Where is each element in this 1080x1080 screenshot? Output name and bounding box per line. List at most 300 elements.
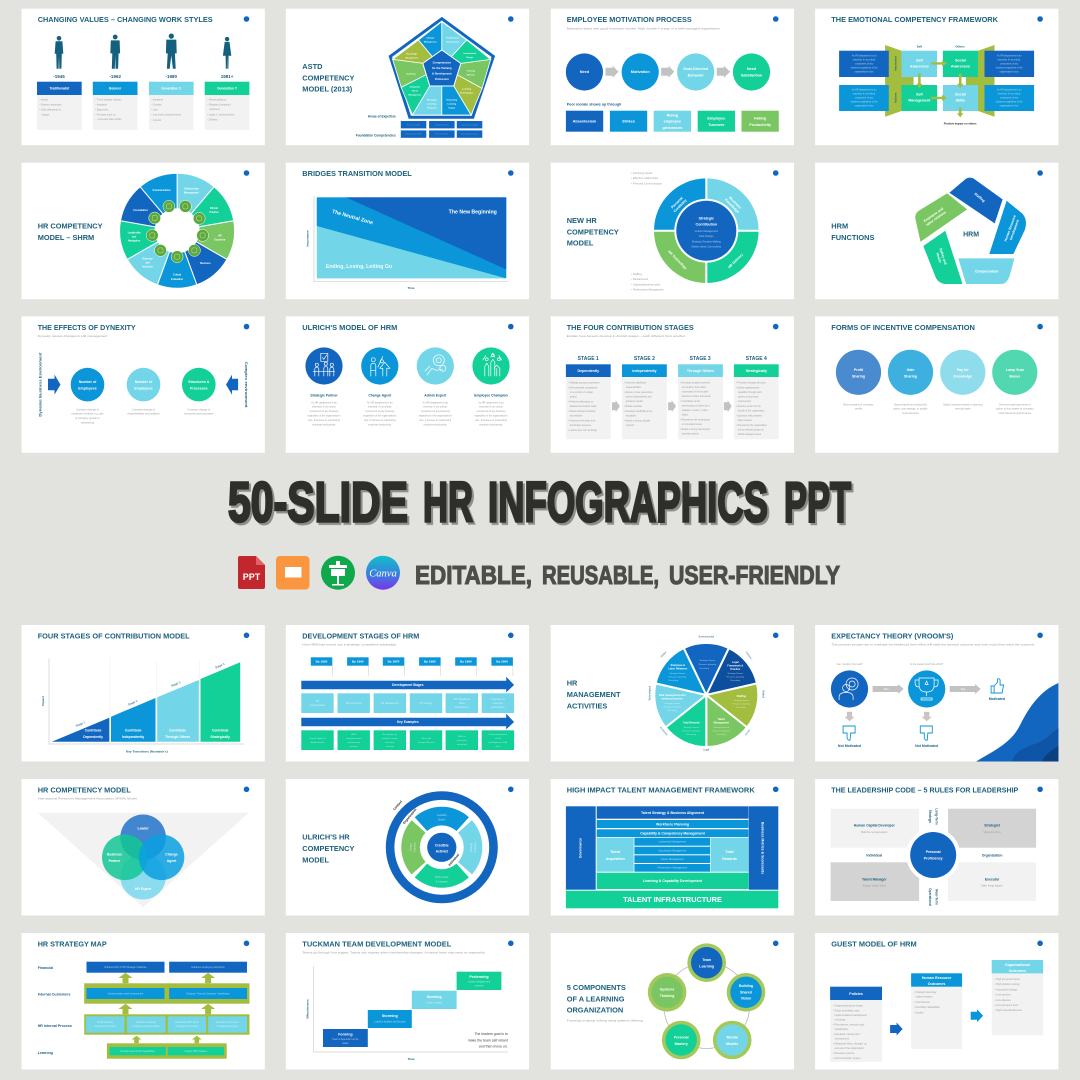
- generation columns: change: [42, 114, 50, 117]
- chart: stepped area: Contribute: [125, 728, 142, 732]
- heading: activities: HR: [567, 679, 578, 688]
- example boxes: Administration: [311, 741, 325, 744]
- framework diagram: Awareness: [951, 65, 970, 69]
- chart: pentagon: Programs: [427, 107, 437, 110]
- stage columns: Dependently: [578, 369, 599, 373]
- bullets: • Personal Communication: [631, 181, 662, 185]
- heading: ASTD: COMPETENCY: [302, 73, 355, 82]
- outer factor labels: Political: [762, 690, 765, 699]
- note: leader goal: [468, 1032, 508, 1048]
- heading: HRM functions: FUNCTIONS: [831, 233, 874, 242]
- panel: ASTD competency model: [286, 9, 529, 145]
- question captions: Can I perform the task?: [836, 663, 863, 666]
- chart: pentagon: Instructional: [464, 52, 476, 55]
- row labels: [38, 966, 72, 1055]
- chart: stepped area: Contribute: [85, 728, 102, 732]
- chart: pentagon: Managing: [427, 100, 437, 102]
- chart: competency wheel: Inclusion: [142, 266, 153, 269]
- chart: pentagon: Technologies: [460, 93, 474, 95]
- column: organizational outcomes: • Low grievance level: [995, 1004, 1019, 1007]
- heading: dynexity: THE EFFECTS OF DYNEXITY: [38, 323, 136, 332]
- chart: competency wheel: Ethical: [210, 207, 218, 210]
- center circle: Proficiency: [924, 856, 943, 860]
- arrows: [118, 973, 215, 1043]
- framework blocks: Career Management: [661, 858, 684, 861]
- framework blocks: Talent Strategy & Business Alignment: [641, 811, 705, 815]
- stage columns: • Develops broader business: [680, 381, 711, 384]
- role descriptions: An HR department is an: [423, 401, 449, 404]
- panel: employee motivation process: Motivation starts with good employee morale. High morale = a sign of a well-managed organization.: [567, 26, 721, 30]
- chart: pentagon: Management: [405, 57, 418, 60]
- descriptions: improvements: [902, 411, 919, 415]
- stage boxes: HR: [316, 700, 319, 703]
- chart: staircase: Leader delegates and: [468, 980, 491, 984]
- chart: concentric rings: [390, 796, 494, 899]
- incentive circles: Sharing: [904, 374, 917, 378]
- stage columns: on important issues: [682, 423, 703, 426]
- panel: expectancy theory: [815, 625, 1058, 762]
- framework diagram: Self: [916, 59, 923, 63]
- panel: learning organization: [551, 933, 794, 1070]
- role descriptions: employee productivity.: [479, 423, 503, 426]
- stage columns: [566, 364, 779, 439]
- foundation labels: Areas of Expertise: [368, 115, 396, 119]
- heading: new HR: NEW HR: [567, 216, 597, 225]
- stage boxes: Value: [459, 702, 465, 705]
- icon: PPT file: [238, 556, 265, 589]
- framework diagram: business regardless of the: [851, 101, 878, 104]
- generation columns: • Diehard: [208, 119, 218, 122]
- icon: four silhouettes: [55, 34, 231, 69]
- outer factor labels: Global: [660, 651, 667, 658]
- column: policies: socialization: [835, 1028, 849, 1031]
- chart: staircase: [305, 966, 508, 1061]
- generation columns: • Little willingness to: [40, 109, 62, 112]
- subtitle: EDITABLE,: [415, 560, 532, 590]
- arrows: [606, 66, 730, 78]
- chart: competency wheel: Practice: [209, 211, 219, 214]
- outer factor labels: Social: [744, 729, 751, 736]
- poor morale boxes: grievances: [662, 126, 682, 130]
- stage columns: • Exercise power for the: [736, 405, 762, 408]
- poor morale boxes: Strikes: [622, 120, 635, 124]
- bullets: • Development: [631, 277, 648, 281]
- heading: strategy map: HR STRATEGY MAP: [38, 940, 107, 949]
- heading: new HR: [567, 216, 619, 248]
- circles: Processes: [190, 386, 208, 390]
- role descriptions: An HR department is an: [478, 401, 504, 404]
- chart: activity pie: Strategic Human: [734, 699, 750, 702]
- stage columns: • Relies on less supervision;: [624, 391, 654, 394]
- example boxes: development of HR: [489, 741, 508, 744]
- chart: activity pie: Staffing: [737, 695, 746, 698]
- chart: competency wheel: Navigation: [128, 240, 141, 243]
- heading: contribution stages: THE FOUR CONTRIBUTION STAGES: [567, 323, 694, 332]
- chart: competency wheel: HR: [218, 235, 222, 238]
- poor morale boxes: Employee: [707, 117, 725, 121]
- stage columns: • Builds a strong collegial: [624, 419, 651, 422]
- heading: SHRM: HR COMPETENCY: [38, 222, 103, 231]
- descriptions: Salary increase based on learning: [943, 402, 983, 406]
- stage boxes: Stakeholders: [455, 706, 470, 709]
- column: organizational outcomes: • Low absence: [995, 999, 1012, 1002]
- stage columns: • Performs effectively on: [568, 400, 594, 403]
- panel: HR strategy map: [22, 933, 265, 1070]
- years: -1962: [109, 74, 121, 79]
- framework blocks: Business Metrics & Scorecards: [761, 822, 765, 874]
- arrows: yes: Yes: [884, 687, 889, 691]
- framework diagram: organization's size: [1000, 105, 1019, 108]
- descriptions: to company growth or: [75, 416, 100, 420]
- generation columns: • Needs guidance: [208, 99, 227, 102]
- example boxes: computerization: [346, 737, 362, 740]
- chart: activity pie: Framework &: [727, 664, 743, 668]
- generation columns: • Lacks + / personal drive: [208, 114, 235, 117]
- incentive circles: Gain: [907, 368, 914, 372]
- chart: activity pie: Recruiting: [737, 706, 747, 709]
- panel: leadership code: [815, 779, 1058, 916]
- panel: development stages of HRM: How HRM has turned into a strategic competitive advantage: [302, 643, 397, 647]
- framework diagram: essential, if not critical,: [853, 59, 876, 62]
- generation columns: • Avoids: [40, 99, 49, 102]
- years: 1981+: [221, 74, 234, 79]
- chart: ring: [654, 178, 759, 283]
- example boxes: [301, 730, 514, 750]
- foundation boxes: Industry Knowledge: [461, 123, 479, 126]
- chart: concentric rings: HR Innovator: [435, 876, 449, 879]
- framework diagram: Awareness: [894, 55, 898, 71]
- example boxes: workforce needs: [382, 737, 399, 740]
- chart: activity pie: Resource planning: [713, 730, 731, 732]
- framework blocks: Total: [725, 850, 734, 854]
- chart: HRM cycle: Safety and: [938, 248, 948, 265]
- descriptions: Constant change of: [132, 407, 155, 411]
- foundation boxes: Personal Skills: [435, 134, 448, 136]
- stage boxes: HR Strategy: [419, 702, 433, 705]
- chart: pentagon: Training: [467, 70, 476, 73]
- chart: five circles: Vision: [741, 997, 751, 1001]
- arrows: yes: Yes: [961, 687, 966, 691]
- panel: talent management framework: [551, 779, 794, 916]
- chart: competency wheel: Expertise: [214, 239, 226, 242]
- column: policies: development: [835, 1038, 849, 1040]
- outer factor labels: Technological: [649, 686, 652, 701]
- heading: SHRM: MODEL – SHRM: [38, 233, 94, 242]
- timeline flags: [311, 657, 513, 676]
- quadrant boxes: Strategist: [984, 824, 1001, 828]
- panel: forms of incentive compensation: [815, 316, 1058, 453]
- outer factor labels: Cultural /: [745, 651, 753, 661]
- stage labels: STAGE 2: [634, 356, 655, 362]
- panel: effects of dynexity: Dynexity causes changes in HR management: [38, 334, 108, 338]
- descriptions: Constant change of: [76, 407, 99, 411]
- chart: concentric rings: Builder: [438, 818, 446, 821]
- chart: five circles: Building: [739, 984, 753, 988]
- role descriptions: employee productivity.: [312, 423, 336, 426]
- panel: emotional competency framework: [815, 9, 1058, 145]
- framework blocks: Succession Management: [658, 849, 687, 852]
- stage columns: • Willingly accepts supervision: [568, 381, 600, 384]
- role descriptions: regardless of the organization's: [419, 414, 453, 417]
- column: HR outcomes: • Quality: [914, 1012, 924, 1014]
- chart: pentagon: Knowledge: [406, 54, 418, 56]
- foundation labels: Foundation Competencies: [356, 134, 396, 138]
- chart: competency wheel: Evaluation: [171, 278, 184, 281]
- icon: slides: [276, 556, 310, 590]
- chart: activity pie: Total Rewards: [683, 722, 700, 724]
- venn diagram: [102, 814, 184, 900]
- labels: not motivated: Not Motivated: [915, 744, 938, 748]
- poor morale boxes: Falling: [754, 117, 767, 121]
- framework diagram: business regardless of the: [851, 67, 878, 70]
- chart: pentagon: Delivery: [467, 74, 476, 77]
- strategy blocks: Enhance ROI of HR Strategic Initiatives: [105, 966, 147, 969]
- ring labels: Individual: [447, 853, 460, 867]
- chart: five circles: Systems: [660, 988, 674, 992]
- outer factor labels: Environmental: [699, 636, 714, 638]
- chart: staircase: Forming: [338, 1032, 353, 1036]
- heading: incentive: FORMS OF INCENTIVE COMPENSATION: [831, 323, 975, 332]
- stage columns: Strategically: [746, 369, 767, 373]
- panel: four contribution stages: [551, 316, 794, 453]
- column: policies: • Recruitment, selection and: [833, 1024, 865, 1026]
- venn diagram: Leader: [138, 826, 149, 830]
- stage columns: • Builds expertise: [624, 405, 643, 408]
- chart: concentric rings: Positioner: [474, 842, 477, 852]
- main title: 50-SLIDE: [228, 470, 408, 534]
- column: organizational outcomes: Organizational: [1005, 963, 1030, 967]
- role names: Admin Expert: [424, 393, 447, 397]
- stage columns: network: [626, 424, 635, 427]
- role descriptions: [307, 401, 508, 426]
- chart: activity pie: Strategic Human: [714, 726, 730, 729]
- subtitle: USER-FRIENDLY: [669, 560, 840, 590]
- column: policies: • Communication system: [833, 1057, 861, 1060]
- chart: HRM cycle: [915, 178, 1026, 284]
- chart: HRM cycle: HRM: [963, 232, 979, 239]
- stage columns: on a portion of a larger: [570, 391, 593, 394]
- framework blocks: Learning & Capability Development: [643, 879, 703, 883]
- panel: four contribution stages: Explain how careers develop in distinct stages – each different from another.: [567, 334, 686, 338]
- panel: four stages of contribution model: [22, 625, 265, 762]
- stage columns: responsibilities: [626, 386, 642, 389]
- chart: pentagon: Improvement: [446, 41, 460, 44]
- generation columns: processes than results: [98, 118, 122, 121]
- question captions: [836, 663, 944, 666]
- descriptions: structures and processes: [184, 412, 214, 416]
- stage columns: improvement: [738, 400, 752, 403]
- arrow: development stages: Development Stages: [392, 683, 424, 687]
- stage columns: Through Others: [687, 369, 714, 373]
- chart: activity pie: Recruiting: [717, 733, 727, 736]
- chart: stepped area: [41, 658, 244, 754]
- column: HR outcomes: [911, 973, 962, 1049]
- stage columns: leader: [682, 413, 688, 416]
- column: organizational outcomes: • Successful change: [995, 988, 1018, 992]
- framework diagram: component of any: [1000, 63, 1019, 66]
- ring labels: Organization: [402, 808, 418, 825]
- label: motivated: Motivated: [989, 697, 1005, 701]
- column: organizational outcomes: • High problem solving: [995, 983, 1020, 986]
- foundation boxes: Technology Literacy: [461, 133, 478, 136]
- strategy blocks: [84, 962, 250, 1059]
- time labels: Operational: [928, 888, 932, 906]
- chart: transition zones: [305, 196, 508, 290]
- column: policies: of change: [835, 1018, 846, 1022]
- example boxes: learning: [350, 745, 358, 748]
- chart: competency wheel: Business: [200, 262, 211, 265]
- chart: activity pie: Talent: [718, 718, 725, 721]
- framework blocks: Acquisition: [606, 857, 625, 861]
- descriptions: stock based on performance: [998, 411, 1032, 415]
- chart: ring: Contribution: [696, 223, 717, 227]
- chart: pentagon: Learning: [462, 88, 472, 91]
- heading: expectancy: EXPECTANCY THEORY (VROOM'S): [831, 632, 954, 641]
- generation columns: • Impatient: [152, 99, 163, 102]
- descriptions: gains, cost savings, or quality: [894, 407, 928, 411]
- descriptions: One-time cash payments or: [999, 402, 1031, 406]
- venn diagram: HR Expert: [135, 887, 152, 891]
- chart: staircase: Effectiveness: [305, 999, 309, 1019]
- chart: activity pie: Management: [714, 722, 729, 724]
- years: [53, 74, 234, 79]
- chart: activity pie: [654, 643, 758, 747]
- framework blocks: Performance Management: [657, 867, 687, 870]
- role descriptions: regardless of the organization's: [307, 414, 341, 417]
- role descriptions: component of any business: [476, 410, 506, 413]
- bullets: [631, 171, 664, 292]
- framework diagram: An HR department is an: [852, 89, 877, 92]
- generation columns: • Focused more on: [96, 114, 116, 117]
- column: HR outcomes: Outcomes: [928, 982, 945, 986]
- process circles: [566, 53, 770, 91]
- stage columns: future leaders: [738, 419, 753, 422]
- stage labels: STAGE 4: [746, 356, 767, 362]
- framework blocks: [566, 806, 778, 908]
- note: leader goal: and then move on.: [479, 1044, 508, 1048]
- strategy blocks: recruitment process: [95, 1025, 116, 1028]
- example boxes: of HR: [495, 738, 501, 740]
- chart: pentagon: Profession: [435, 77, 449, 81]
- generation columns: Generation X: [161, 87, 182, 91]
- chart: staircase: Team is dependent on the: [332, 1038, 359, 1041]
- chart: ring: Strategic Decision-Making: [692, 240, 721, 243]
- process circles: Satisfaction: [741, 74, 763, 78]
- icon circles: [305, 347, 510, 385]
- chart: HRM cycle: Development: [1009, 218, 1020, 241]
- chart: activity pie: Strategic Human: [670, 672, 686, 675]
- foundation boxes: Business Skills: [407, 124, 420, 126]
- stage columns: understand in the broader: [682, 390, 709, 393]
- panel: learning organization: Focusing on group solving using systems thinking: [567, 1018, 643, 1022]
- chart: activity pie: Recruiting: [700, 667, 710, 670]
- main title: HR: [423, 470, 473, 534]
- chart: pentagon: Integrated: [410, 86, 421, 89]
- generation columns: • Low level of assertiveness: [152, 114, 182, 117]
- time labels: [928, 808, 939, 906]
- process circles: Behavior: [688, 74, 704, 78]
- column: organizational outcomes: [992, 960, 1043, 1035]
- chart: activity pie: Risk management and: [659, 694, 686, 697]
- role descriptions: component of any business: [421, 410, 451, 413]
- stage columns: • Learns how "we" do things: [568, 429, 598, 432]
- heading: learning organization: OF A LEARNING: [567, 994, 625, 1003]
- chart: competency wheel: and: [132, 236, 137, 239]
- descriptions: employee numbers e.g. due: [71, 412, 104, 416]
- stage columns: • Develops credibility and a: [624, 410, 653, 413]
- stage boxes: [301, 693, 514, 713]
- generation columns: Generation Y: [217, 87, 238, 91]
- outer factor labels: Economic: [659, 726, 669, 737]
- framework diagram: component of any: [855, 97, 874, 100]
- years: -1945: [53, 74, 65, 79]
- arrows: [890, 1009, 983, 1036]
- chart: activity pie: Recruiting: [731, 679, 741, 682]
- stage boxes: HR Transitional: [454, 698, 470, 701]
- stage columns: perspective; help others: [682, 386, 707, 389]
- icons: down arrows and thumbs down: [843, 712, 932, 740]
- framework blocks: Talent: [610, 850, 621, 854]
- chart: competency wheel: Diversity: [142, 258, 153, 261]
- example boxes: HRM as: [458, 736, 467, 738]
- chart: stepped area: Strategically: [210, 735, 230, 739]
- generation columns: Traditionalist: [49, 87, 70, 91]
- chart: stepped area: Impact: [41, 696, 45, 706]
- chart: competency wheel: [120, 173, 235, 288]
- chart: activity pie: Resource planning: [664, 706, 682, 708]
- stage labels: STAGE 1: [578, 356, 599, 362]
- generation columns: structures: [210, 108, 221, 111]
- example boxes: through HR work: [418, 741, 435, 744]
- heading: Ulrich: ULRICH'S MODEL OF HRM: [302, 323, 397, 332]
- poor morale boxes: Rising: [667, 114, 679, 118]
- chart: stepped area: Key Transitions (Novation's): [126, 750, 168, 754]
- icon circles: [831, 670, 945, 708]
- side labels: Dynamic Business Environment: [38, 351, 42, 417]
- panel: employee motivation process: [551, 9, 794, 145]
- example boxes: and personal: [347, 741, 361, 744]
- chart: competency wheel: Critical: [173, 274, 181, 277]
- arrows: [612, 400, 732, 412]
- chart: activity pie: Recruiting: [669, 679, 679, 682]
- chart: five circles: [648, 943, 765, 1059]
- chart: stepped area: Contribute: [212, 728, 229, 732]
- chart: ring: Strategic: [699, 217, 714, 221]
- strategy blocks: Build excellent: [97, 1021, 113, 1024]
- example boxes: and value: [385, 742, 395, 744]
- stage columns: • Builds organizational: [736, 386, 760, 389]
- poor morale label: Poor morale shows up through: [567, 103, 622, 107]
- arrow: key examples: [301, 714, 514, 729]
- framework diagram: business regardless of the: [996, 101, 1023, 104]
- strategy blocks: Enhance strategic: [137, 1021, 157, 1024]
- caption: positive impact: Positive impact on others: [944, 121, 977, 125]
- heading: motivation: EMPLOYEE MOTIVATION PROCESS: [567, 15, 692, 24]
- role descriptions: employee productivity.: [423, 423, 447, 426]
- column: HR outcomes: • Flexibility/ adaptability: [914, 1006, 941, 1009]
- wave decoration: [976, 683, 1058, 762]
- heading: SHRM: [38, 222, 103, 242]
- stage columns: reputation: [626, 414, 637, 417]
- role descriptions: size. It focuses on maximizing: [308, 419, 341, 422]
- arrows: yes: [873, 684, 981, 694]
- poor morale boxes: Turnover: [708, 123, 725, 127]
- example boxes: HRIS: [351, 734, 357, 736]
- heading: Guest: GUEST MODEL OF HRM: [831, 940, 917, 949]
- heading: activities: [567, 679, 621, 710]
- heading: Ulrich's HR: [302, 833, 355, 864]
- stage columns: project: [570, 395, 577, 398]
